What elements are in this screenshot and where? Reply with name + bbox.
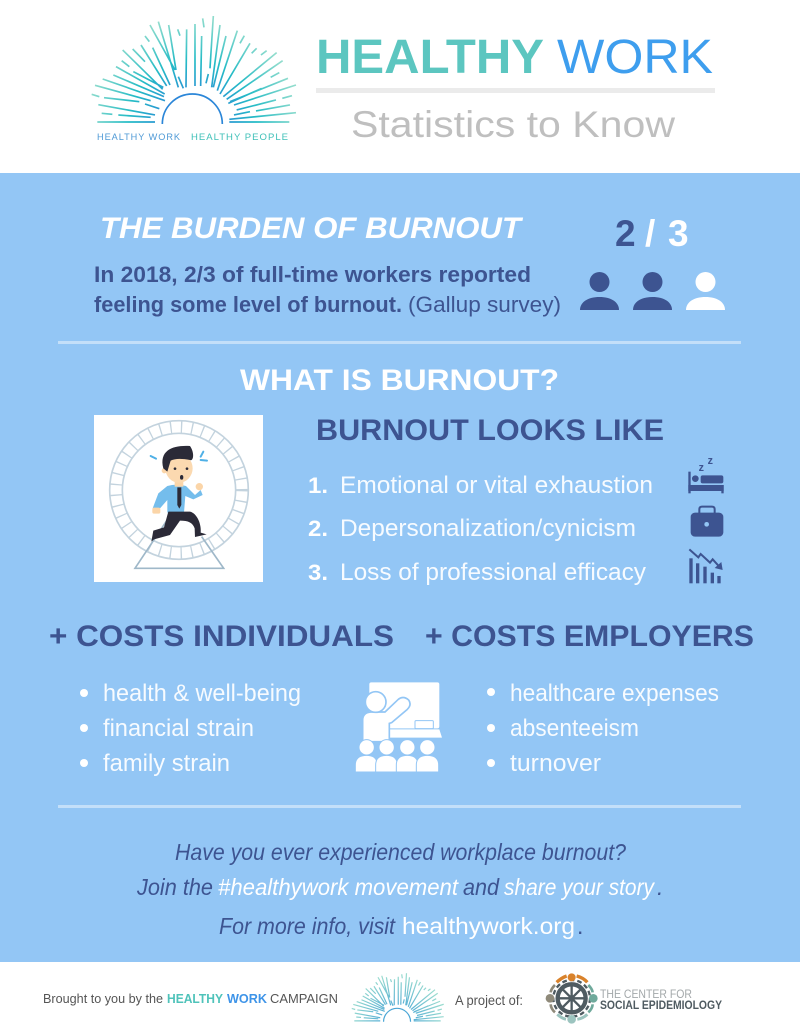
call to action: share your story: [504, 874, 655, 900]
call to action: .: [657, 874, 663, 900]
footer credit: HEALTHY: [167, 991, 223, 1006]
list: costs to employers: healthcare expenses: [510, 680, 719, 707]
wheel: [110, 421, 248, 568]
text: burnout statistic: In 2018, 2/3 of full-time workers reported: [94, 262, 531, 287]
icon: bed: z: [699, 462, 704, 474]
footer text: a project of: A project of:: [455, 992, 523, 1008]
title divider: [316, 88, 715, 93]
call to action: healthywork.org: [402, 913, 575, 939]
call to action: For more info, visit: [219, 913, 396, 939]
text: burnout statistic: [94, 262, 561, 317]
header background: [0, 0, 800, 173]
stat: 2 / 3: /: [645, 213, 655, 254]
list: burnout dimensions: 2.: [308, 516, 328, 541]
list: costs to individuals: family strain: [103, 750, 230, 777]
call to action: Have you ever experienced workplace burnout?: [175, 839, 626, 865]
stat: 2 / 3: 3: [668, 213, 689, 254]
list: costs to individuals: health & well-being: [103, 680, 301, 707]
list: costs to individuals: [80, 680, 301, 777]
heading: costs employers: + COSTS EMPLOYERS: [425, 620, 754, 653]
title: healthy work: WORK: [557, 31, 713, 84]
text: burnout statistic: feeling some level of burnout.: [94, 292, 402, 317]
footer credit: [43, 991, 338, 1006]
illustration: man running in hamster wheel: [94, 415, 263, 582]
list: costs to individuals: financial strain: [103, 715, 254, 742]
list: costs to employers: turnover: [510, 750, 601, 777]
footer credit: WORK: [227, 991, 268, 1006]
heading: burnout looks like: BURNOUT LOOKS LIKE: [316, 414, 664, 447]
list: costs to employers: absenteeism: [510, 715, 639, 742]
text: burnout statistic: (Gallup survey): [408, 292, 561, 317]
footer credit: Brought to you by the: [43, 991, 163, 1006]
list: burnout dimensions: [308, 472, 653, 586]
icon: teacher and students: [355, 682, 442, 772]
heading: the burden of burnout: THE BURDEN OF BURNOUT: [100, 212, 524, 245]
title: healthy work: [316, 31, 713, 84]
call to action: and: [463, 874, 500, 900]
footer logo: sunburst: [352, 973, 444, 1022]
call to action: #healthywork movement: [218, 874, 460, 900]
heading: what is burnout: WHAT IS BURNOUT?: [240, 364, 559, 397]
stat: 2 / 3: [615, 213, 689, 254]
main blue panel: [0, 173, 800, 962]
icon: bed: [688, 455, 724, 493]
logo: center for social epidemiology: SOCIAL EPIDEMIOLOGY: [600, 998, 722, 1012]
icon: declining chart: [689, 549, 723, 583]
icon: three people, two highlighted: [580, 272, 725, 310]
footer credit: CAMPAIGN: [270, 991, 338, 1006]
logo: center for social epidemiology: THE CENTER FOR: [600, 987, 692, 1001]
list: burnout dimensions: Emotional or vital exhaustion: [340, 472, 653, 499]
icon: briefcase: [691, 507, 723, 537]
list: burnout dimensions: 3.: [308, 560, 328, 585]
man: [151, 446, 207, 542]
heading: costs individuals: + COSTS INDIVIDUALS: [49, 620, 394, 653]
footer background: [0, 962, 800, 1035]
logo: healthy work sunburst: HEALTHY WORK: [97, 132, 181, 143]
stat: 2 / 3: 2: [615, 213, 636, 254]
subtitle: Statistics to Know: [351, 104, 675, 145]
icon: bed: z: [708, 455, 713, 467]
logo: healthy work sunburst: [92, 16, 296, 143]
title: healthy work: HEALTHY: [316, 31, 544, 84]
list: burnout dimensions: Loss of professional efficacy: [340, 559, 646, 586]
list: costs to employers: [487, 680, 719, 777]
logo: healthy work sunburst: HEALTHY PEOPLE: [191, 132, 289, 143]
call to action: [136, 839, 663, 939]
call to action: Join the: [136, 874, 213, 900]
list: burnout dimensions: 1.: [308, 473, 328, 498]
list: burnout dimensions: Depersonalization/cynicism: [340, 515, 636, 542]
logo: center for social epidemiology: [546, 973, 722, 1024]
call to action: .: [577, 913, 583, 939]
